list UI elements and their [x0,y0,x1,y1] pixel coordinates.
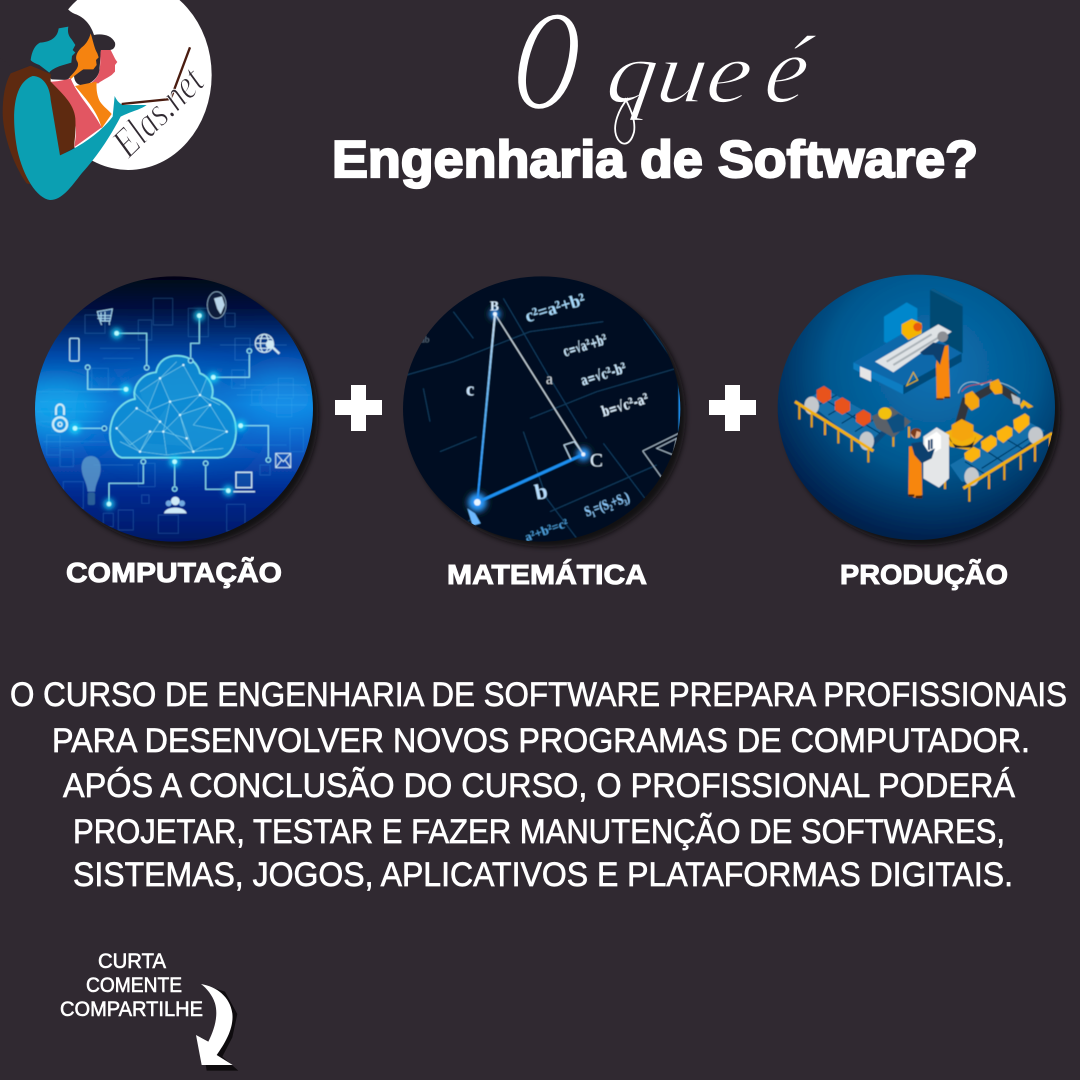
icon: shopping cart [97,309,112,325]
body text block: SISTEMAS, JOGOS, APLICATIVOS E PLATAFORMAS DIGITAIS. [73,856,1013,894]
plus sign one [335,385,382,431]
triangle labels: c [466,380,474,401]
icon: globe [207,292,226,318]
triangle labels: a [546,371,553,388]
label: matemática: MATEMÁTICA [447,559,647,590]
body text block [10,676,1067,894]
label: computação: COMPUTAÇÃO [66,557,282,588]
call to action text [60,950,203,1021]
blue technology background [30,272,320,548]
formulas: c²=a²+b² [523,289,587,326]
formulas: a=√c²-b² [579,361,628,389]
logo white disc [45,0,212,170]
robot arm [943,379,1033,450]
call to action text: COMENTE [86,974,182,997]
logo woman two: orange head [69,33,99,79]
call to action text: CURTA [98,950,166,973]
worker at panel [908,428,935,498]
right conveyor [945,413,1052,502]
logo laptop [122,47,190,104]
icon: people [164,497,187,513]
triangle labels: C [590,451,603,472]
title flourish: q loop [615,98,634,144]
plus sign two [709,385,756,431]
icon: light bulb [82,456,101,505]
panel: matemática image [400,272,687,548]
title word que: que [601,25,759,121]
formulas: a²+b²=c² [523,516,570,544]
triangle glows [468,309,590,512]
small square diagram [643,433,679,478]
body text block: PROJETAR, TESTAR E FAZER MANUTENÇÃO DE SOFTWARES, [73,813,1005,851]
formulas [421,289,651,544]
dark grid background [400,272,687,548]
circle shadow [783,280,1060,545]
icon: padlock [53,404,67,431]
arrow [196,984,238,1071]
icon: phone [70,338,79,361]
logo woman two: pink body [50,78,102,147]
body text block: APÓS A CONCLUSÃO DO CURSO, O PROFISSIONAL PODERÁ [63,767,1015,805]
logo: Elas.net [0,0,214,200]
icon: laptop [233,472,255,492]
logo woman one: teal head [31,27,75,73]
logo woman three: pink head [91,50,117,83]
title: O que é [507,0,820,144]
circuit lines [75,316,268,504]
call to action text: COMPARTILHE [60,998,203,1021]
worker at machine [920,331,950,400]
logo woman one: teal body and arm [14,76,147,200]
triangle labels: B [490,299,499,314]
logo woman three: orange body [75,82,112,128]
label: produção: PRODUÇÃO [840,559,1008,590]
triangle vertices [474,312,585,506]
circle shadow [408,282,686,547]
glowing nodes [70,311,271,509]
logo hair silhouette [0,0,115,85]
circle shadow [40,282,318,547]
control panel [923,427,949,488]
left conveyor [795,386,911,462]
triangle labels: b [533,478,550,505]
formulas: c=√a²+b² [561,332,609,360]
icon: envelope [276,453,291,468]
milling machine [853,288,963,394]
panel: produção image [775,272,1062,548]
blue background [775,272,1062,548]
logo woman one: brown dress [3,66,76,187]
cloud [110,356,236,458]
body text block: PARA DESENVOLVER NOVOS PROGRAMAS DE COMPUTADOR. [52,722,1030,760]
formulas: S₁=(S₂+S₃) [583,489,632,520]
triangle [477,314,583,502]
formulas: b=√c²-a² [600,391,651,420]
title: Engenharia de Software?: Engenharia de Software? [332,131,978,189]
formulas: ab [421,335,430,345]
logo wordmark: Elas.net [103,57,214,167]
icon: magnifier globe [255,334,279,354]
triangle labels [466,299,603,505]
panel: computação image [13,272,323,548]
title letter é: é [759,16,820,123]
